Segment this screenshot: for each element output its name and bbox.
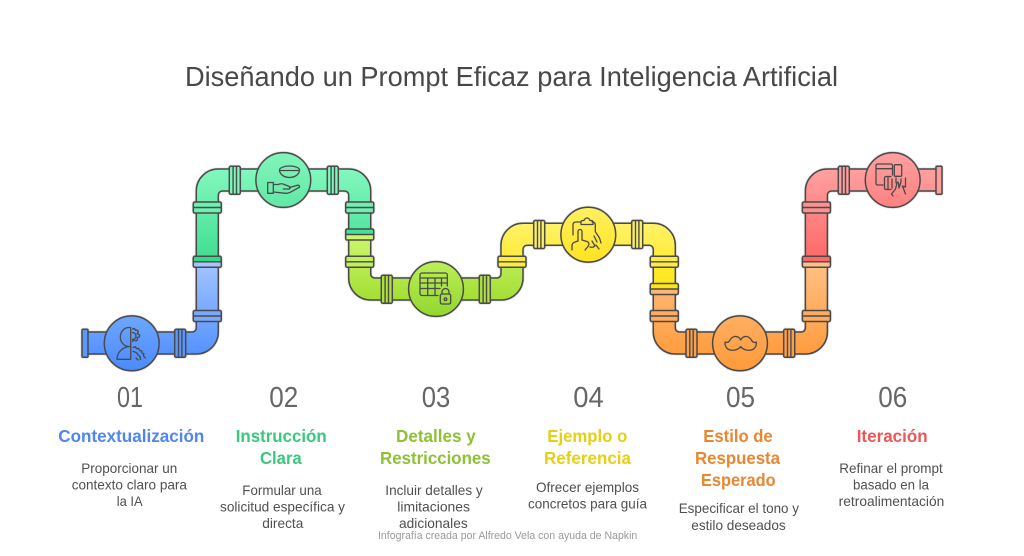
pipe segment: green xyxy=(196,169,371,262)
number 02: 02 xyxy=(269,382,298,414)
step 05 xyxy=(679,382,799,533)
heading: Estilo de Respuesta Esperado: Estilo de xyxy=(703,426,773,446)
description 06: Refinar el prompt xyxy=(839,461,943,476)
collar: yellow to orange xyxy=(650,284,678,294)
collars: orange xyxy=(650,310,830,357)
collars: red xyxy=(802,166,942,213)
collars: yellow xyxy=(498,220,678,267)
heading: Ejemplo o Referencia xyxy=(544,426,631,468)
collar: red to orange xyxy=(802,256,830,267)
description 06: basado en la xyxy=(853,478,929,492)
heading: Instrucción Clara: Instrucción xyxy=(236,426,327,446)
collar: green to lime xyxy=(346,229,374,240)
description 06 xyxy=(839,461,944,509)
icon: table with lock xyxy=(409,262,463,316)
step 03 xyxy=(380,382,491,531)
heading: Ejemplo o Referencia: Referencia xyxy=(544,448,631,468)
pipeline xyxy=(82,153,942,371)
step 02 xyxy=(220,382,345,531)
step 06 xyxy=(839,382,944,509)
number 01: 01 xyxy=(117,382,143,414)
description 06: retroalimentación xyxy=(839,494,944,509)
collars: green xyxy=(193,166,374,213)
pipe segment: orange xyxy=(653,262,827,354)
description 03: adicionales xyxy=(399,516,468,531)
description 03: limitaciones xyxy=(397,500,470,514)
icon: bowl and open hand xyxy=(256,153,311,207)
number 06: 06 xyxy=(878,382,907,414)
collars: blue xyxy=(82,310,221,357)
description 04: concretos para guía xyxy=(528,496,647,512)
description 04: Ofrecer ejemplos xyxy=(536,480,639,495)
icon: mustache xyxy=(713,316,767,371)
pipe segment: yellow xyxy=(501,223,675,289)
description 05 xyxy=(679,501,799,533)
collar: green to blue xyxy=(193,256,221,267)
description 04 xyxy=(528,480,647,512)
icon: clipboard in hand xyxy=(561,207,616,262)
icon: devices and hand xyxy=(865,153,920,207)
description 05: estilo deseados xyxy=(691,518,786,533)
description 02 xyxy=(220,483,345,531)
description 03: Incluir detalles y xyxy=(385,483,483,498)
heading: Estilo de Respuesta Esperado: Esperado xyxy=(701,470,776,490)
heading: Iteración: Iteración xyxy=(857,426,928,446)
step 01 xyxy=(58,382,204,509)
heading: Estilo de Respuesta Esperado xyxy=(695,426,780,490)
description 01: contexto claro para xyxy=(72,478,187,492)
icon: person and gears xyxy=(104,316,159,371)
number 04: 04 xyxy=(573,382,604,414)
heading: Instrucción Clara xyxy=(236,426,327,468)
description 01 xyxy=(72,461,187,509)
step 04 xyxy=(528,382,647,512)
heading: Contextualización: Contextualización xyxy=(58,426,204,446)
footer credit: Infografía creada por Alfredo Vela con ayuda de Napkin xyxy=(378,530,637,542)
heading: Detalles y Restricciones: Detalles y xyxy=(396,426,476,446)
heading: Ejemplo o Referencia: Ejemplo o xyxy=(547,426,627,446)
heading: Detalles y Restricciones xyxy=(380,426,491,468)
heading: Estilo de Respuesta Esperado: Respuesta xyxy=(695,448,780,468)
description 05: Especificar el tono y xyxy=(679,501,799,516)
description 02: solicitud específica y xyxy=(220,500,345,514)
heading: Instrucción Clara: Clara xyxy=(260,448,302,468)
description 01: la IA xyxy=(117,494,144,509)
number 05: 05 xyxy=(726,382,755,414)
description 02: directa xyxy=(262,516,304,531)
pipe segment: blue xyxy=(85,262,218,354)
collars: lime xyxy=(346,256,490,303)
pipe segment: lime xyxy=(349,234,523,300)
pipe segment: red xyxy=(805,169,938,262)
title: Diseñando un Prompt Eficaz para Inteligencia Artificial xyxy=(185,61,838,92)
description 03 xyxy=(385,483,483,531)
number 03: 03 xyxy=(422,382,450,414)
description 01: Proporcionar un xyxy=(81,461,177,476)
description 02: Formular una xyxy=(242,483,322,498)
heading: Detalles y Restricciones: Restricciones xyxy=(380,448,491,468)
